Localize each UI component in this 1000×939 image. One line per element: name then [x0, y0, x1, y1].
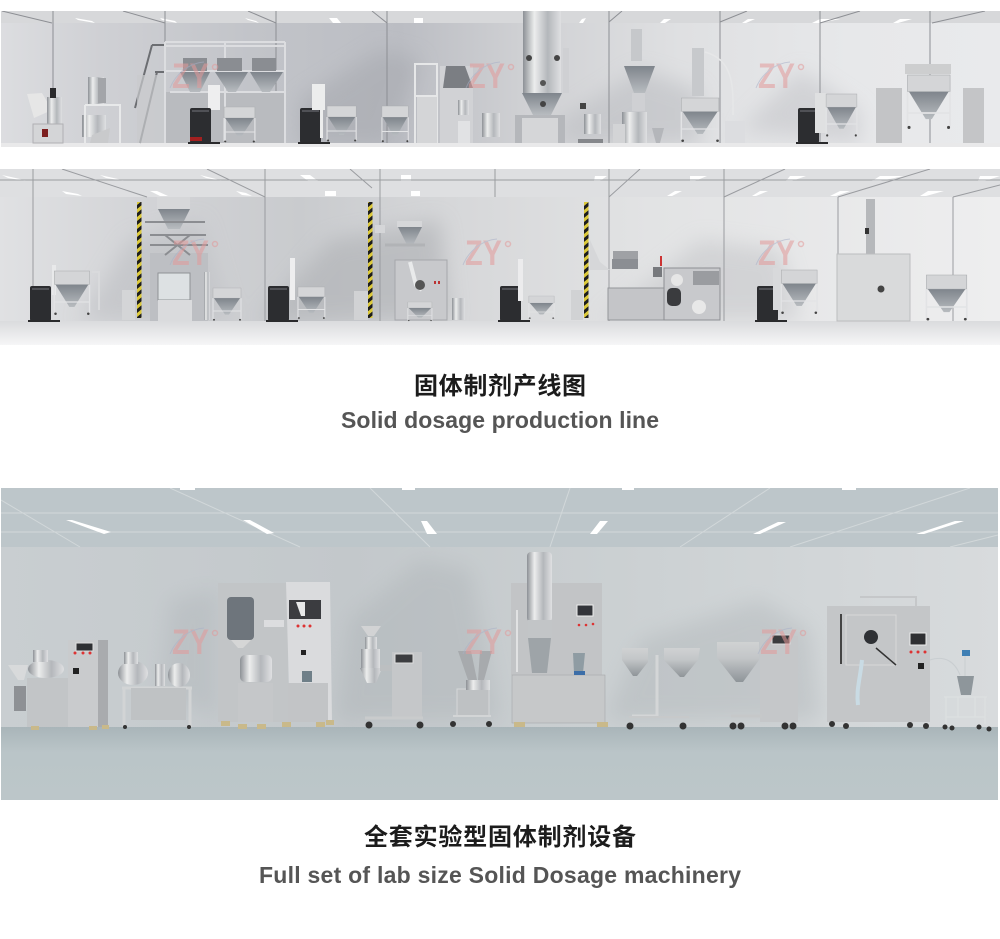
machine: bin on castors — [926, 275, 967, 320]
ZY watermark — [170, 234, 218, 273]
wall background — [1, 23, 1000, 143]
machine: lifter with bin — [298, 84, 356, 143]
wall shadows — [304, 58, 862, 143]
machine: small mixer — [578, 103, 603, 143]
machine: lifter with low bin — [498, 259, 554, 321]
machine: small mill on stand — [450, 651, 492, 727]
ceiling lights — [75, 18, 912, 23]
heading: lab size machinery — [259, 823, 741, 888]
ZY watermark — [463, 623, 510, 662]
machine: crusher — [27, 88, 63, 143]
room columns — [2, 11, 985, 143]
machine: lifter with bin — [796, 93, 857, 143]
English title: Full set of lab size Solid Dosage machinery — [259, 862, 741, 888]
machine: twin tanks on table — [118, 652, 192, 729]
machine: lifter with bin — [28, 265, 99, 321]
machine: lifter with bin — [266, 258, 325, 321]
machine: tablet press with overhead bin — [122, 197, 241, 321]
panel: production line upper strip — [1, 11, 1000, 147]
hazard pole — [137, 202, 142, 318]
English title: Solid dosage production line — [341, 407, 659, 433]
machine: bin — [382, 106, 408, 142]
machine: oscillating granulator — [360, 626, 424, 728]
ZY watermark — [170, 62, 218, 88]
ceiling band — [102, 11, 1000, 23]
Chinese title: 固体制剂产线图 — [414, 373, 586, 400]
machine: lifter with bin — [755, 268, 817, 321]
ZY watermark — [756, 234, 804, 273]
ceiling lights — [66, 488, 964, 534]
ZY watermark — [463, 234, 510, 273]
wall shadows — [160, 560, 820, 720]
machine: peristaltic pump stand — [930, 650, 992, 732]
machine: feeder with bin — [680, 48, 720, 142]
ceiling grid — [1, 488, 998, 547]
wall — [1, 547, 998, 727]
machine: hot-air cabinet with duct — [837, 199, 910, 321]
machine: spray dryer — [218, 582, 334, 729]
machine: double-cone mixer — [622, 648, 700, 730]
machine: fluid bed granulator — [515, 11, 569, 143]
machine: dosing platform with three hoppers — [135, 42, 285, 143]
ceiling band — [108, 169, 1000, 197]
ZY watermark — [466, 62, 514, 88]
machine: vacuum feeder tower — [613, 29, 664, 143]
ZY watermark — [170, 623, 218, 662]
machine: blister packaging line — [571, 240, 720, 320]
heading: production line — [341, 373, 659, 433]
ZY watermark — [756, 62, 804, 88]
ceiling — [1, 488, 998, 547]
Chinese title: 全套实验型固体制剂设备 — [364, 823, 636, 851]
floor — [1, 727, 998, 800]
wall background — [0, 197, 1000, 321]
reflective floor — [0, 321, 1000, 345]
floor — [1, 143, 858, 147]
machine: single-cone mixer — [717, 635, 798, 730]
panel: lab-size machinery room — [1, 488, 998, 800]
machine: sifter — [82, 77, 120, 143]
hazard pole — [368, 202, 372, 318]
ceiling lights — [2, 175, 1000, 196]
hazard pole — [584, 202, 588, 318]
machine: granulator with stairs — [415, 64, 500, 143]
machine: mill with overhead bin — [354, 221, 465, 321]
wall shadows — [80, 220, 800, 320]
machine: lab fluid bed — [511, 552, 608, 727]
machine: tablet coater — [827, 597, 930, 729]
machine: wet granulator — [8, 640, 109, 730]
panel: production line lower strip — [0, 169, 1000, 345]
ZY watermark — [758, 623, 806, 662]
machine: tumbling blender — [876, 64, 984, 143]
room columns — [0, 169, 1000, 321]
